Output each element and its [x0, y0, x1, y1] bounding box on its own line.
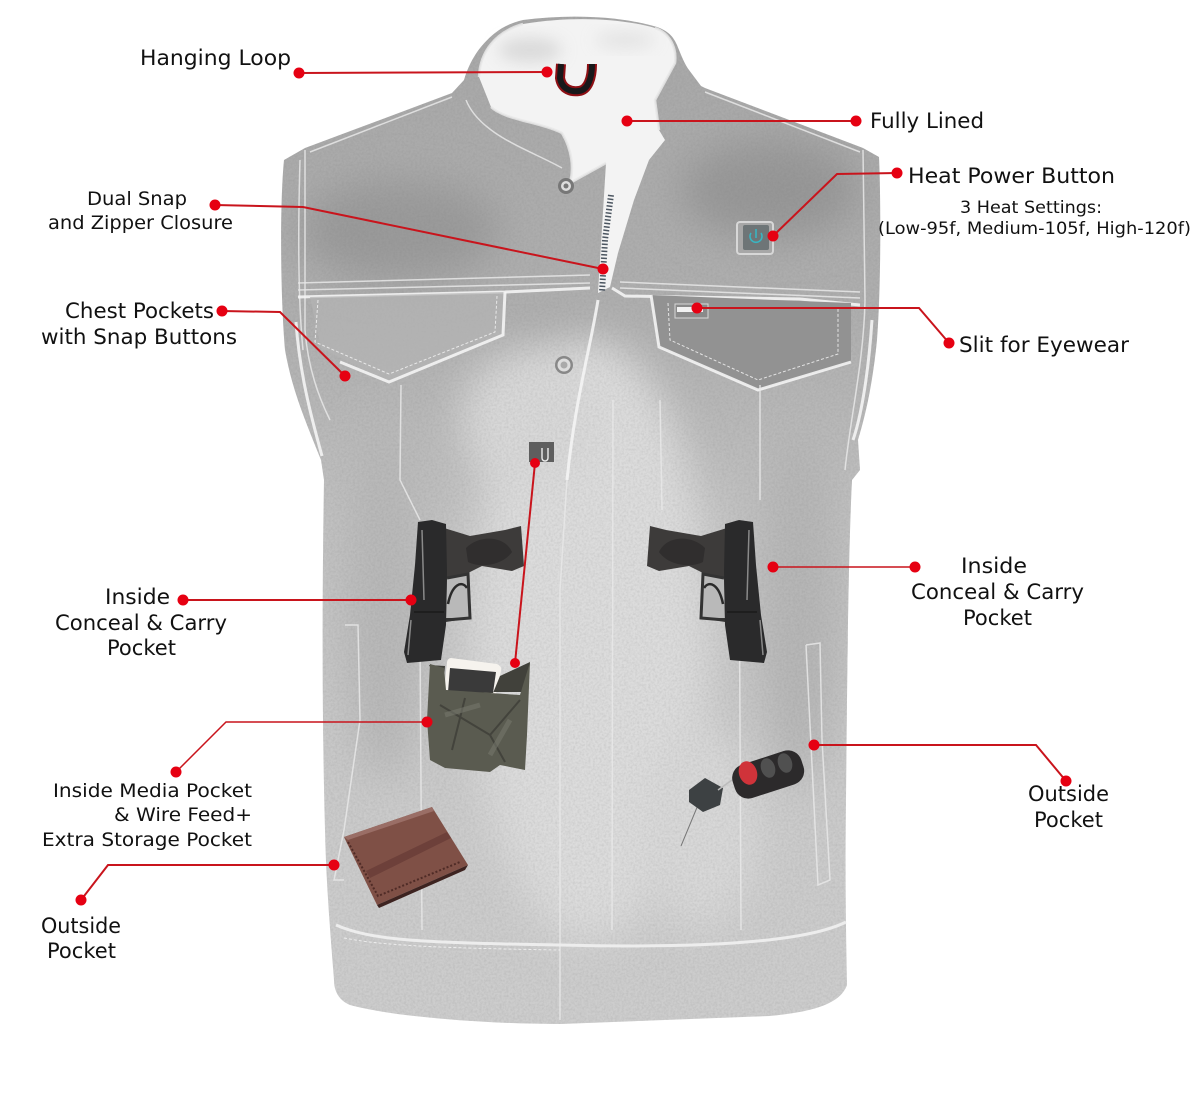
- chest pocket: left: [310, 292, 505, 382]
- phone: [444, 658, 501, 694]
- icon: pistol left: [404, 520, 524, 663]
- mesh pocket: [429, 662, 530, 693]
- callout: outside pocket left: Outside: [41, 914, 121, 938]
- snap button: top: [558, 178, 574, 194]
- callout: dual snap and zipper closure: Dual Snap: [87, 188, 187, 210]
- callout: inside media pocket: [42, 716, 432, 851]
- callout: inside conceal and carry pocket left: Conceal & Carry: [55, 611, 227, 635]
- vest body: [281, 17, 880, 1024]
- icon: car key and fob: [681, 747, 808, 846]
- callout: inside conceal and carry pocket left: Inside: [105, 585, 170, 609]
- callout: chest pockets: with Snap Buttons: [41, 325, 237, 349]
- callout: inside media pocket: Extra Storage Pocket: [42, 829, 252, 851]
- pocket seams: right outside: [806, 643, 830, 885]
- callout: fully lined: Fully Lined: [870, 109, 984, 133]
- lining: [479, 19, 675, 293]
- callout: inside conceal and carry pocket right: [768, 554, 1084, 630]
- connector: wire feed to media pocket: [510, 458, 540, 668]
- callout: fully lined: [622, 109, 984, 133]
- callout: heat power button: [768, 164, 1191, 242]
- callout: heat power button: 3 Heat Settings:: [960, 198, 1102, 218]
- callout: inside conceal and carry pocket right: Conceal & Carry: [911, 580, 1084, 604]
- icon: wallet: [344, 807, 468, 908]
- callout: outside pocket left: Pocket: [47, 939, 116, 963]
- eyewear slit: [675, 304, 708, 318]
- callout: outside pocket left: [41, 860, 340, 963]
- yoke lines: [298, 275, 860, 298]
- pocket seams: left outside: [334, 625, 360, 880]
- callout: outside pocket right: Pocket: [1034, 808, 1103, 832]
- callout: chest pockets: Chest Pockets: [65, 299, 214, 323]
- media pocket with phone: [427, 658, 530, 772]
- callout: outside pocket right: [808, 740, 1109, 832]
- callout: slit for eyewear: Slit for Eyewear: [959, 333, 1129, 357]
- callout: hanging loop: [140, 46, 552, 78]
- callout: inside media pocket: Inside Media Pocket: [53, 780, 252, 802]
- callout: heat power button: Heat Power Button: [908, 164, 1115, 188]
- wire feed port: [529, 442, 554, 462]
- snap button: middle: [555, 356, 573, 374]
- shoulder seams and arm edges: [299, 92, 865, 470]
- callout: dual snap and zipper closure: [48, 188, 608, 274]
- callout: inside conceal and carry pocket right: Inside: [961, 554, 1027, 578]
- chest pocket: right: [651, 295, 851, 390]
- vest illustration: [270, 10, 890, 1030]
- callout: inside conceal and carry pocket right: Pocket: [963, 606, 1032, 630]
- callout: inside media pocket: & Wire Feed+: [114, 804, 252, 826]
- icon: pistol right: [647, 520, 767, 663]
- callout: inside conceal and carry pocket left: [55, 585, 416, 660]
- callout: chest pockets: [41, 299, 350, 382]
- callout: hanging loop: Hanging Loop: [140, 46, 291, 70]
- callout: inside conceal and carry pocket left: Pocket: [107, 636, 176, 660]
- central placket: [567, 300, 598, 480]
- nylon pouch: [427, 662, 530, 772]
- collar stitch: [479, 24, 675, 183]
- callout: heat power button: (Low-95f, Medium-105f, High-120f): [878, 219, 1191, 239]
- callout: outside pocket right: Outside: [1028, 782, 1109, 806]
- bottom band: [336, 922, 846, 946]
- icon: hanging loop: [560, 64, 592, 91]
- callout: dual snap and zipper closure: and Zipper Closure: [48, 212, 233, 234]
- zipper: [602, 195, 611, 292]
- icon: heat power button: [737, 222, 773, 254]
- callout: slit for eyewear: [692, 302, 1129, 357]
